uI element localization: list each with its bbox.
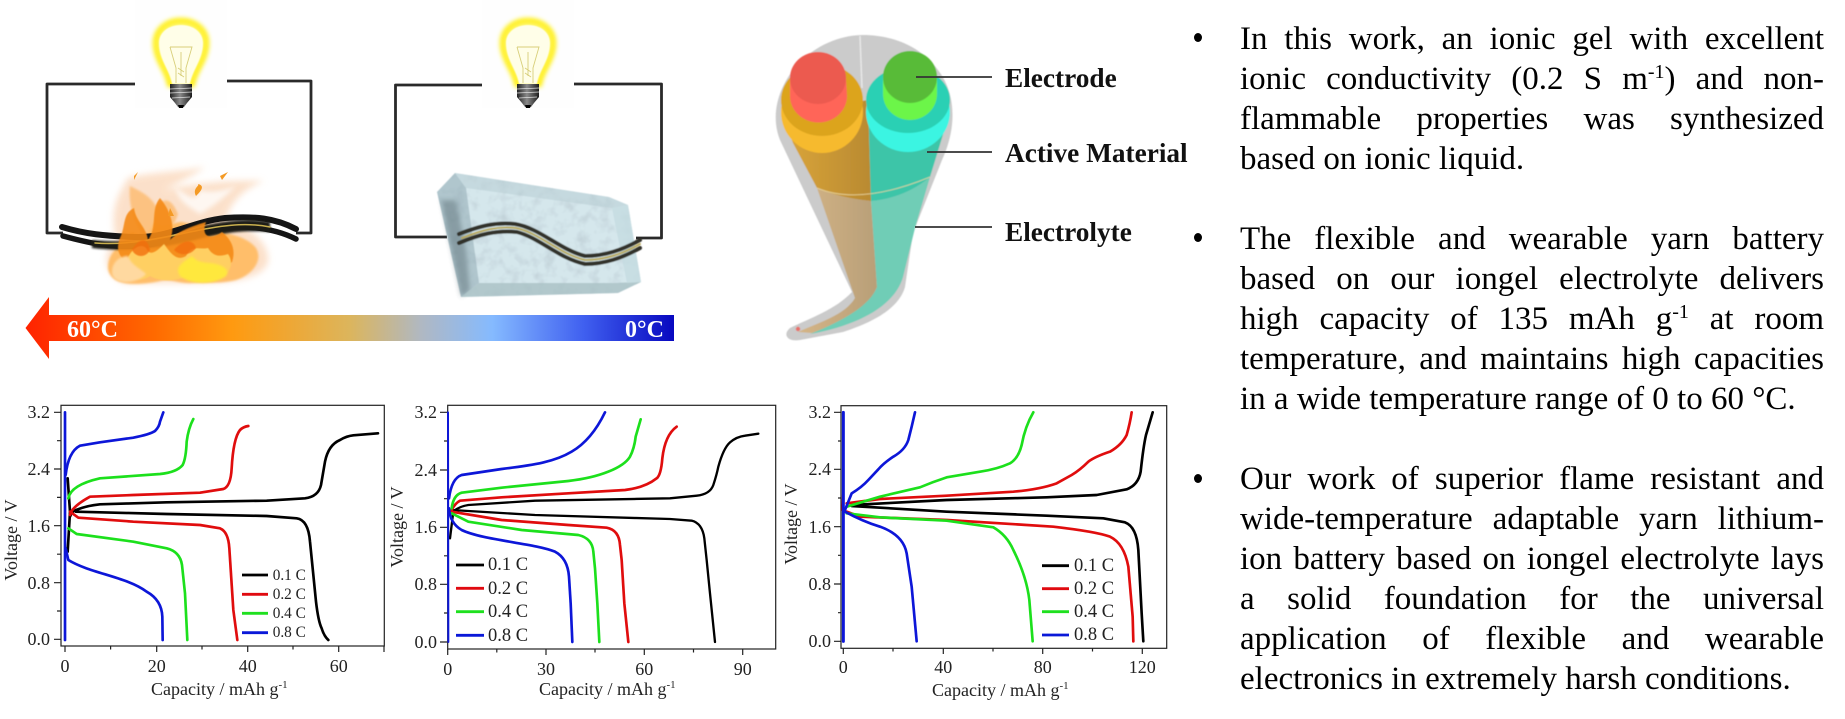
curves xyxy=(842,412,1153,641)
chart: charge-discharge curves, capacity axis to 130 xyxy=(781,402,1167,700)
x axis ticks: 90 xyxy=(734,659,752,679)
y axis title: Voltage / V xyxy=(781,483,801,565)
diagram: yarn battery cross-section xyxy=(776,35,953,340)
arrow label cold: 0°C xyxy=(625,317,664,343)
y axis ticks: 3.2 xyxy=(28,402,50,422)
legend: 0.8 C xyxy=(488,626,528,646)
arrow label hot: 60°C xyxy=(67,317,118,343)
text block: third point: ion battery based on iongel electrolyte lays xyxy=(1240,541,1824,577)
y axis ticks: 2.4 xyxy=(414,460,437,480)
chart: charge-discharge curves, capacity axis to 100 xyxy=(387,402,776,699)
x axis ticks: 0 xyxy=(60,656,70,676)
circuit wire right xyxy=(396,84,662,238)
circuit wire left xyxy=(47,81,311,233)
bullet: third point xyxy=(1194,474,1202,483)
legend: 0.1 C xyxy=(1074,556,1114,576)
legend: 0.8 C xyxy=(273,624,306,641)
curves xyxy=(448,412,758,642)
electrolyte sheath xyxy=(776,35,953,340)
y axis ticks xyxy=(808,402,831,651)
legend xyxy=(1042,556,1114,645)
x axis title: Capacity / mAh g xyxy=(932,680,1059,700)
legend: 0.4 C xyxy=(273,605,306,622)
y axis ticks: 3.2 xyxy=(808,402,831,422)
label: Electrolyte: Electrolyte xyxy=(1005,217,1132,247)
y axis ticks: 0.8 xyxy=(414,574,437,594)
x axis title: -1 xyxy=(666,679,676,691)
text block: third point: electronics in extremely harsh conditions. xyxy=(1240,661,1791,697)
x axis ticks: 0 xyxy=(839,657,848,677)
label: Electrode: Electrode xyxy=(1005,63,1117,93)
y axis ticks: 0.8 xyxy=(28,573,50,593)
x axis ticks: 0 xyxy=(443,659,452,679)
bullet: second point xyxy=(1194,233,1202,242)
legend: 0.1 C xyxy=(273,567,306,584)
panel: circuit with burning yarn battery xyxy=(47,0,311,284)
y axis ticks xyxy=(414,402,437,652)
x axis title: Capacity / mAh g xyxy=(539,679,666,699)
x axis ticks xyxy=(443,659,752,679)
x axis ticks: 60 xyxy=(635,659,653,679)
text block: first point: flammable properties was synthesized xyxy=(1240,101,1824,137)
curves xyxy=(65,412,378,640)
y axis ticks: 2.4 xyxy=(28,459,50,479)
panel: circuit with frozen yarn battery xyxy=(396,0,662,297)
y axis ticks: 0.8 xyxy=(808,574,831,594)
text block: second point xyxy=(1240,221,1824,417)
text block: third point: wide-temperature adaptable yarn lithium- xyxy=(1240,501,1824,537)
text block: third point xyxy=(1240,461,1824,697)
text block: third point: application of flexible and wearable xyxy=(1240,621,1824,657)
bullet: first point xyxy=(1194,33,1202,42)
text block: first point: based on ionic liquid. xyxy=(1240,141,1524,177)
y axis ticks: 0.0 xyxy=(28,629,50,649)
x axis title: -1 xyxy=(1059,680,1069,692)
y axis ticks: 0.0 xyxy=(808,631,831,651)
text block: first point xyxy=(1240,21,1824,177)
text block: first point: ionic conductivity (0.2 S m-1) and non- xyxy=(1240,61,1824,97)
text block: second point: based on our iongel electrolyte delivers xyxy=(1240,261,1824,297)
anode strand xyxy=(810,51,950,334)
x axis ticks: 60 xyxy=(330,656,348,676)
text block: third point: a solid foundation for the universal xyxy=(1240,581,1824,617)
x axis ticks: 20 xyxy=(148,656,166,676)
y axis ticks: 1.6 xyxy=(808,517,831,537)
y axis title: Voltage / V xyxy=(1,499,21,581)
text block: second point: in a wide temperature range of 0 to 60 °C. xyxy=(1240,381,1796,417)
text block: second point: The flexible and wearable yarn battery xyxy=(1240,221,1824,257)
legend: 0.1 C xyxy=(488,555,528,575)
y axis ticks xyxy=(28,402,50,649)
x axis ticks xyxy=(839,657,1156,677)
legend xyxy=(456,555,528,646)
temperature gradient arrow xyxy=(26,297,674,359)
y axis title: Voltage / V xyxy=(387,486,407,568)
chart: charge-discharge curves, capacity axis to 70 xyxy=(1,402,384,699)
x axis title: -1 xyxy=(278,679,288,691)
legend: 0.2 C xyxy=(273,586,306,603)
icon: light bulb left xyxy=(135,0,227,108)
icon: ice block with yarn xyxy=(437,173,641,297)
legend: 0.2 C xyxy=(1074,579,1114,599)
legend: 0.4 C xyxy=(488,602,528,622)
text block: second point: high capacity of 135 mAh g-1 at room xyxy=(1240,301,1824,337)
icon: light bulb right xyxy=(482,0,574,108)
x axis ticks: 30 xyxy=(537,659,555,679)
x axis ticks: 40 xyxy=(239,656,257,676)
x axis title: Capacity / mAh g xyxy=(151,679,278,699)
legend xyxy=(242,567,306,641)
legend: 0.4 C xyxy=(1074,602,1114,622)
x axis ticks: 80 xyxy=(1034,657,1052,677)
y axis ticks: 1.6 xyxy=(28,516,50,536)
text block: second point: temperature, and maintains high capacities xyxy=(1240,341,1824,377)
icon: flames around yarn xyxy=(62,167,296,284)
legend: 0.8 C xyxy=(1074,625,1114,645)
x axis ticks: 40 xyxy=(934,657,952,677)
cathode strand xyxy=(781,52,877,333)
legend: 0.2 C xyxy=(488,579,528,599)
y axis ticks: 0.0 xyxy=(414,632,437,652)
y axis ticks: 2.4 xyxy=(808,459,831,479)
text block: third point: Our work of superior flame resistant and xyxy=(1240,461,1824,497)
y axis ticks: 1.6 xyxy=(414,517,437,537)
x axis ticks xyxy=(60,656,348,676)
y axis ticks: 3.2 xyxy=(414,402,437,422)
text block: first point: In this work, an ionic gel with excellent xyxy=(1240,21,1824,57)
label: Active Material: Active Material xyxy=(1005,138,1188,168)
x axis ticks: 120 xyxy=(1129,657,1156,677)
